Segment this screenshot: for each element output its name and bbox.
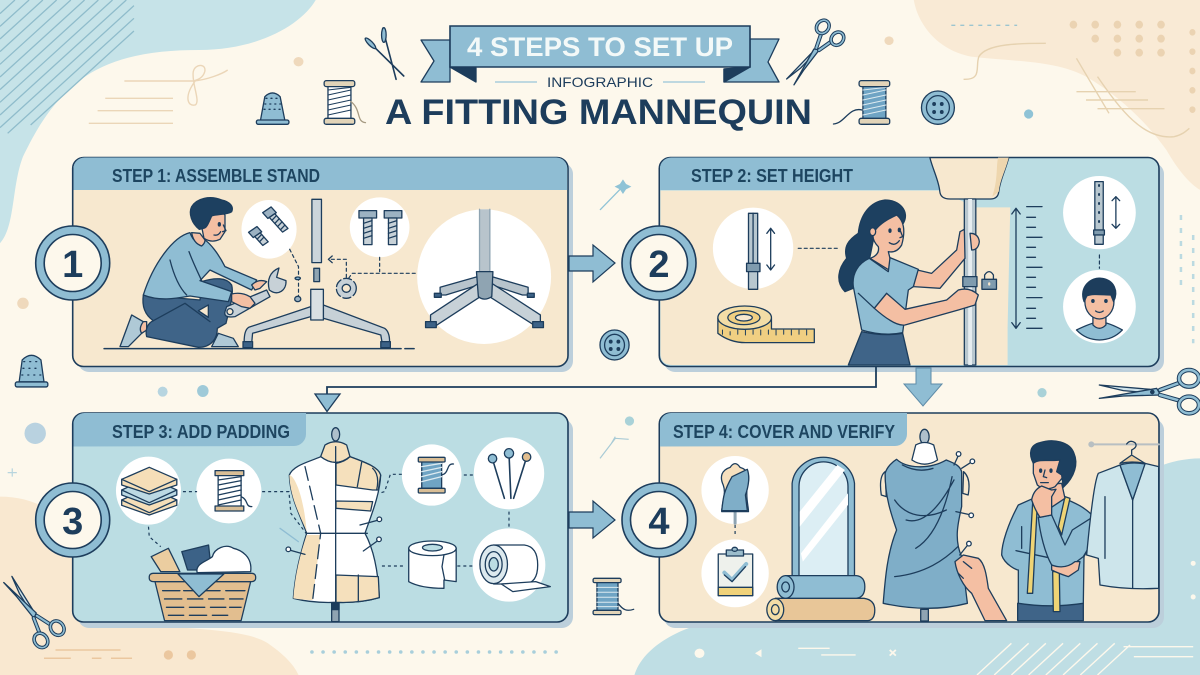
header tab xyxy=(74,413,306,446)
icon: needles xyxy=(364,28,404,79)
title line two: A FITTING MANNEQUIN xyxy=(385,92,812,132)
step label: STEP 3: ADD PADDING xyxy=(112,422,290,442)
illustration: small spool xyxy=(418,457,453,493)
illustration: checklist icon xyxy=(701,539,769,607)
blob: bottom right blue xyxy=(634,458,1200,675)
illustration: basket xyxy=(149,545,256,621)
icon: thimble xyxy=(256,93,289,124)
badge: step 4 xyxy=(622,483,696,557)
decor: lower dots and marks xyxy=(8,298,561,660)
subtitle: INFOGRAPHIC xyxy=(547,74,653,90)
badge: step 1 xyxy=(36,226,110,300)
header band xyxy=(74,157,567,190)
illustration: woman xyxy=(839,200,979,365)
icon: scissors bottom left xyxy=(0,569,67,650)
illustration: base detail xyxy=(426,209,543,328)
panel: step 4 xyxy=(659,413,1164,628)
illustration: bolts right circle xyxy=(359,211,402,245)
illustration: pins xyxy=(488,449,531,498)
blob: top right peach xyxy=(914,0,1200,190)
panel: step 3 xyxy=(73,413,573,628)
illustration: hand pinning xyxy=(955,555,1007,621)
ribbon banner xyxy=(450,26,750,67)
blob: bottom left peach xyxy=(0,497,299,675)
arrow: step 3 to 4 xyxy=(569,501,615,538)
hatch: top left xyxy=(0,0,134,133)
card xyxy=(73,158,573,372)
badge: step 3: 3 xyxy=(62,501,83,543)
icon: spool white xyxy=(324,81,365,124)
illustration: mechanic xyxy=(120,198,286,347)
title line one: 4 STEPS TO SET UP xyxy=(467,32,733,62)
illustration: pole detail circle xyxy=(713,208,839,289)
illustration: bust and pole xyxy=(930,158,1009,365)
illustration: stand assembly xyxy=(104,199,415,349)
icon: sparkle pin xyxy=(600,179,631,210)
panel: step 1 xyxy=(73,157,573,372)
badge: step 1: 1 xyxy=(62,244,83,286)
card xyxy=(659,158,1164,372)
panel: step 2 xyxy=(659,158,1164,372)
icon: button middle xyxy=(600,330,629,360)
illustration: draped form icon xyxy=(701,456,769,524)
illustration: thread spool xyxy=(215,471,252,511)
arrow: step 2 to 3 connector xyxy=(315,367,876,412)
illustration: fabric rolls xyxy=(767,576,875,621)
illustration: height scale xyxy=(1012,207,1042,328)
illustration: white detail circles xyxy=(241,197,551,344)
header band xyxy=(660,158,940,190)
title block xyxy=(385,26,812,132)
icon: scissors right xyxy=(1099,370,1199,413)
illustration: pole scale circle xyxy=(1063,176,1136,268)
illustration: white detail circles xyxy=(116,437,545,602)
header tab xyxy=(660,413,907,446)
badge: step 4: 4 xyxy=(648,501,670,543)
illustration: jacket on hanger xyxy=(1087,441,1159,589)
illustration: draped dress form xyxy=(881,429,975,621)
icon: left ribbon tail xyxy=(421,40,476,82)
badge: step 2: 2 xyxy=(648,244,670,286)
illustration: paper roll xyxy=(409,541,456,588)
illustration: tailor xyxy=(1002,441,1094,621)
step label: STEP 1: ASSEMBLE STAND xyxy=(112,166,320,186)
decor: lower right marks xyxy=(600,388,1193,675)
illustration: padded mannequin xyxy=(280,428,382,622)
icon: scissors top xyxy=(778,18,846,92)
illustration: fabric layers xyxy=(122,467,177,515)
icon: right ribbon tail xyxy=(724,39,779,82)
illustration: bandage roll xyxy=(480,545,550,592)
card xyxy=(659,413,1164,628)
decor: top right texture xyxy=(951,21,1195,343)
illustration: bolts left circle xyxy=(249,207,289,246)
illustration: client portrait xyxy=(1063,270,1136,343)
icon: thimble left xyxy=(15,355,48,387)
arrow: step 2 to 4 xyxy=(904,368,942,406)
decor: top dots and threads xyxy=(89,36,894,123)
step label: STEP 4: COVER AND VERIFY xyxy=(673,422,895,442)
icon: spool bottom right xyxy=(593,578,634,615)
illustration: tape measure xyxy=(718,306,814,343)
illustration: mirror xyxy=(792,457,854,577)
card xyxy=(73,413,573,628)
badge: step 3 xyxy=(36,483,110,557)
blob: top left blue xyxy=(0,0,316,243)
icon: spool blue xyxy=(833,81,890,124)
connector dash xyxy=(734,525,736,537)
badge: step 2 xyxy=(622,226,696,300)
subtitle rules xyxy=(495,81,705,83)
icon: button top xyxy=(921,91,954,124)
step label: STEP 2: SET HEIGHT xyxy=(691,166,853,186)
arrow: step 1 to 2 xyxy=(569,245,615,282)
peach area xyxy=(660,191,1010,365)
illustration: dashed connectors xyxy=(148,474,509,566)
